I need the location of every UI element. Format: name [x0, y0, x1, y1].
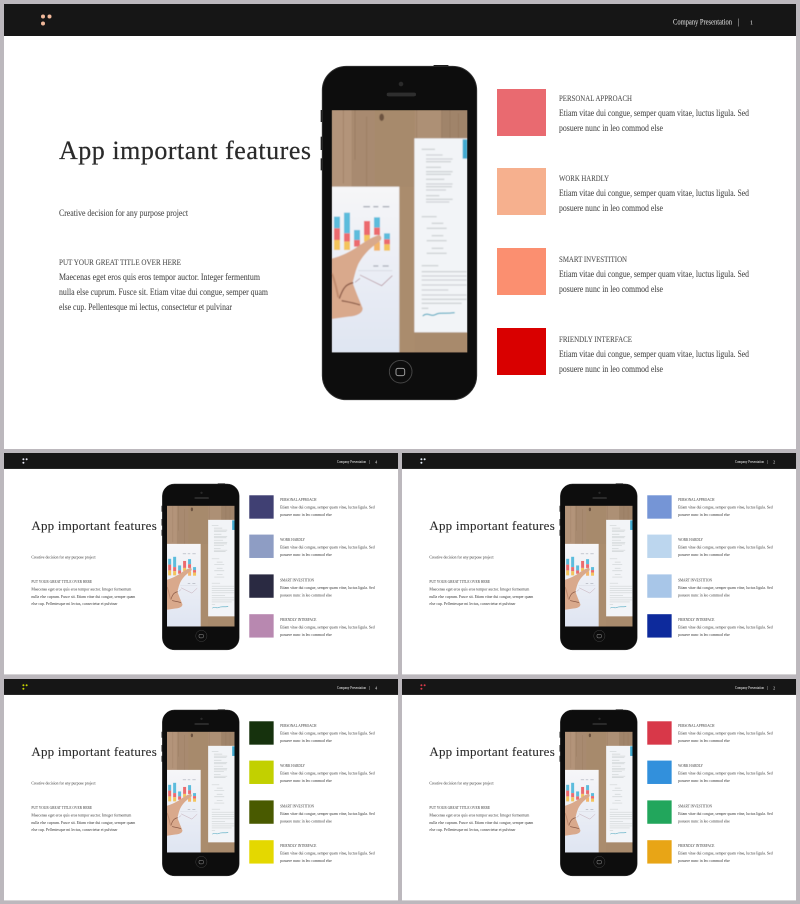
- feature: friendly interface: FRIENDLY INTERFACE: [559, 334, 632, 344]
- panel: small slide, indigo palette: Etiam vitae dui congue, semper quam vitae, luctus ligula. Sed: [280, 505, 375, 511]
- panel: small slide, blue palette: |: [767, 459, 768, 464]
- panel: small slide, green and yellow palette: SMART INVESTITION: [280, 803, 314, 808]
- panel: small slide, indigo palette: SMART INVESTITION: [280, 577, 314, 582]
- header label: Company Presentation: [673, 18, 732, 26]
- panel: small slide, indigo palette: WORK HARDLY: [280, 537, 305, 542]
- panel: small slide, multicolour palette: posuere nunc in leo commod else: [678, 858, 730, 863]
- icon: smartphone with chart photo: [321, 65, 477, 400]
- title: App important features: [59, 136, 311, 165]
- panel: small slide, multicolour palette: Etiam vitae dui congue, semper quam vitae, luctus ligula. Sed: [678, 851, 773, 857]
- panel: small slide, green and yellow palette: else cup. Pellentesque mi lectus, consectetur et pulvinar: [31, 827, 118, 833]
- panel: small slide, green and yellow palette: [4, 679, 398, 900]
- panel: small slide, indigo palette: Etiam vitae dui congue, semper quam vitae, luctus ligula. Sed: [280, 585, 375, 591]
- panel: small slide, multicolour palette: nulla else cuprum. Fusce sit. Etiam vitae dui congue, semper quam: [429, 820, 534, 826]
- panel: small slide, indigo palette: [4, 453, 398, 674]
- panel: small slide, indigo palette: PERSONAL APPROACH: [280, 497, 316, 502]
- feature: personal approach: posuere nunc in leo commod else: [559, 124, 663, 134]
- panel: small slide, blue palette: Company Presentation: [735, 459, 764, 464]
- panel: small slide, indigo palette: Creative decision for any purpose project: [31, 554, 96, 559]
- text block: left description: PUT YOUR GREAT TITLE OVER HERE: [59, 257, 181, 267]
- panel: small slide, indigo palette: nulla else cuprum. Fusce sit. Etiam vitae dui congue, semper quam: [31, 594, 136, 600]
- panel: small slide, green and yellow palette: FRIENDLY INTERFACE: [280, 843, 317, 848]
- panel: small slide, blue palette: posuere nunc in leo commod else: [678, 552, 730, 557]
- panel: small slide, indigo palette: else cup. Pellentesque mi lectus, consectetur et pulvinar: [31, 601, 118, 607]
- panel: main slide, coral palette: [4, 4, 796, 449]
- panel: small slide, blue palette: posuere nunc in leo commod else: [678, 592, 730, 597]
- panel: small slide, blue palette: PERSONAL APPROACH: [678, 497, 714, 502]
- panel: small slide, indigo palette: posuere nunc in leo commod else: [280, 552, 332, 557]
- icon: logo dots: [41, 14, 52, 26]
- panel: small slide, multicolour palette: SMART INVESTITION: [678, 803, 712, 808]
- panel: small slide, green and yellow palette: posuere nunc in leo commod else: [280, 778, 332, 783]
- feature: personal approach: [497, 89, 749, 136]
- text block: left description: else cup. Pellentesque mi lectus, consectetur et pulvinar: [59, 303, 233, 313]
- panel: small slide, blue palette: SMART INVESTITION: [678, 577, 712, 582]
- panel: small slide, blue palette: 2: [773, 460, 775, 465]
- feature: work hardly: posuere nunc in leo commod else: [559, 204, 663, 214]
- feature: smart investition: [497, 248, 749, 295]
- panel: small slide, blue palette: Etiam vitae dui congue, semper quam vitae, luctus ligula. Sed: [678, 545, 773, 551]
- panel: small slide, indigo palette: Company Presentation: [337, 459, 366, 464]
- panel: small slide, indigo palette: App important features: [31, 518, 157, 533]
- panel: small slide, multicolour palette: Creative decision for any purpose project: [429, 780, 494, 785]
- feature: personal approach: Etiam vitae dui congue, semper quam vitae, luctus ligula. Sed: [559, 109, 749, 119]
- feature: work hardly: WORK HARDLY: [559, 173, 609, 183]
- panel: small slide, green and yellow palette: 4: [375, 686, 377, 691]
- panel: small slide, green and yellow palette: posuere nunc in leo commod else: [280, 818, 332, 823]
- panel: small slide, green and yellow palette: PERSONAL APPROACH: [280, 723, 316, 728]
- feature: smart investition: Etiam vitae dui congue, semper quam vitae, luctus ligula. Sed: [559, 270, 749, 280]
- panel: small slide, multicolour palette: PERSONAL APPROACH: [678, 723, 714, 728]
- header bar: [4, 4, 796, 36]
- panel: small slide, blue palette: Maecenas eget eros quis eros tempor auctor. Integer fermentum: [429, 586, 530, 591]
- panel: small slide, green and yellow palette: Creative decision for any purpose project: [31, 780, 96, 785]
- feature: work hardly: Etiam vitae dui congue, semper quam vitae, luctus ligula. Sed: [559, 189, 749, 199]
- panel: small slide, multicolour palette: Etiam vitae dui congue, semper quam vitae, luctus ligula. Sed: [678, 771, 773, 777]
- panel: small slide, green and yellow palette: WORK HARDLY: [280, 763, 305, 768]
- panel: small slide, green and yellow palette: Etiam vitae dui congue, semper quam vitae, luctus ligula. Sed: [280, 811, 375, 817]
- panel: small slide, green and yellow palette: |: [369, 685, 370, 690]
- panel: small slide, blue palette: Etiam vitae dui congue, semper quam vitae, luctus ligula. Sed: [678, 585, 773, 591]
- panel: small slide, multicolour palette: posuere nunc in leo commod else: [678, 778, 730, 783]
- panel: small slide, blue palette: Etiam vitae dui congue, semper quam vitae, luctus ligula. Sed: [678, 505, 773, 511]
- feature: friendly interface: posuere nunc in leo commod else: [559, 365, 663, 375]
- panel: small slide, green and yellow palette: App important features: [31, 744, 157, 759]
- panel: small slide, blue palette: FRIENDLY INTERFACE: [678, 617, 715, 622]
- panel: small slide, indigo palette: Etiam vitae dui congue, semper quam vitae, luctus ligula. Sed: [280, 545, 375, 551]
- feature: friendly interface: [497, 328, 749, 375]
- panel: small slide, multicolour palette: App important features: [429, 744, 555, 759]
- feature: work hardly: [497, 168, 749, 215]
- panel: small slide, blue palette: App important features: [429, 518, 555, 533]
- feature: smart investition: SMART INVESTITION: [559, 254, 628, 264]
- panel: small slide, blue palette: Etiam vitae dui congue, semper quam vitae, luctus ligula. Sed: [678, 625, 773, 631]
- panel: small slide, indigo palette: Maecenas eget eros quis eros tempor auctor. Integer fermentum: [31, 586, 132, 591]
- panel: small slide, multicolour palette: WORK HARDLY: [678, 763, 703, 768]
- panel: small slide, green and yellow palette: posuere nunc in leo commod else: [280, 858, 332, 863]
- panel: small slide, multicolour palette: FRIENDLY INTERFACE: [678, 843, 715, 848]
- panel: small slide, multicolour palette: Etiam vitae dui congue, semper quam vitae, luctus ligula. Sed: [678, 811, 773, 817]
- panel: small slide, blue palette: [402, 453, 796, 674]
- panel: small slide, multicolour palette: PUT YOUR GREAT TITLE OVER HERE: [429, 805, 490, 810]
- panel: small slide, multicolour palette: posuere nunc in leo commod else: [678, 738, 730, 743]
- panel: small slide, indigo palette: posuere nunc in leo commod else: [280, 512, 332, 517]
- panel: small slide, indigo palette: posuere nunc in leo commod else: [280, 632, 332, 637]
- panel: small slide, green and yellow palette: Etiam vitae dui congue, semper quam vitae, luctus ligula. Sed: [280, 731, 375, 737]
- panel: small slide, green and yellow palette: PUT YOUR GREAT TITLE OVER HERE: [31, 805, 92, 810]
- panel: small slide, indigo palette: posuere nunc in leo commod else: [280, 592, 332, 597]
- text block: left description: Maecenas eget eros quis eros tempor auctor. Integer fermentum: [59, 272, 261, 283]
- panel: small slide, multicolour palette: Maecenas eget eros quis eros tempor auctor. Integer fermentum: [429, 812, 530, 817]
- panel: small slide, indigo palette: PUT YOUR GREAT TITLE OVER HERE: [31, 579, 92, 584]
- header divider: |: [738, 18, 740, 26]
- panel: small slide, green and yellow palette: Etiam vitae dui congue, semper quam vitae, luctus ligula. Sed: [280, 851, 375, 857]
- feature: friendly interface: Etiam vitae dui congue, semper quam vitae, luctus ligula. Sed: [559, 350, 749, 360]
- panel: small slide, blue palette: nulla else cuprum. Fusce sit. Etiam vitae dui congue, semper quam: [429, 594, 534, 600]
- panel: small slide, blue palette: posuere nunc in leo commod else: [678, 632, 730, 637]
- text block: left description: nulla else cuprum. Fusce sit. Etiam vitae dui congue, semper quam: [59, 288, 269, 298]
- subtitle: Creative decision for any purpose project: [59, 208, 188, 219]
- panel: small slide, multicolour palette: else cup. Pellentesque mi lectus, consectetur et pulvinar: [429, 827, 516, 833]
- page number: 1: [750, 20, 753, 26]
- panel: small slide, blue palette: else cup. Pellentesque mi lectus, consectetur et pulvinar: [429, 601, 516, 607]
- panel: small slide, indigo palette: Etiam vitae dui congue, semper quam vitae, luctus ligula. Sed: [280, 625, 375, 631]
- panel: small slide, green and yellow palette: Company Presentation: [337, 685, 366, 690]
- panel: small slide, indigo palette: |: [369, 459, 370, 464]
- panel: small slide, blue palette: WORK HARDLY: [678, 537, 703, 542]
- panel: small slide, blue palette: PUT YOUR GREAT TITLE OVER HERE: [429, 579, 490, 584]
- panel: small slide, multicolour palette: [402, 679, 796, 900]
- panel: small slide, multicolour palette: posuere nunc in leo commod else: [678, 818, 730, 823]
- panel: small slide, indigo palette: FRIENDLY INTERFACE: [280, 617, 317, 622]
- panel: small slide, green and yellow palette: nulla else cuprum. Fusce sit. Etiam vitae dui congue, semper quam: [31, 820, 136, 826]
- feature: personal approach: PERSONAL APPROACH: [559, 93, 632, 103]
- panel: small slide, green and yellow palette: posuere nunc in leo commod else: [280, 738, 332, 743]
- panel: small slide, blue palette: Creative decision for any purpose project: [429, 554, 494, 559]
- text block: left description: [59, 257, 269, 313]
- panel: small slide, green and yellow palette: Etiam vitae dui congue, semper quam vitae, luctus ligula. Sed: [280, 771, 375, 777]
- panel: small slide, multicolour palette: Company Presentation: [735, 685, 764, 690]
- panel: small slide, blue palette: posuere nunc in leo commod else: [678, 512, 730, 517]
- panel: small slide, multicolour palette: Etiam vitae dui congue, semper quam vitae, luctus ligula. Sed: [678, 731, 773, 737]
- panel: small slide, indigo palette: 4: [375, 460, 377, 465]
- panel: small slide, multicolour palette: |: [767, 685, 768, 690]
- panel: small slide, green and yellow palette: Maecenas eget eros quis eros tempor auctor. Integer fermentum: [31, 812, 132, 817]
- feature: smart investition: posuere nunc in leo commod else: [559, 285, 663, 295]
- panel: small slide, multicolour palette: 2: [773, 686, 775, 691]
